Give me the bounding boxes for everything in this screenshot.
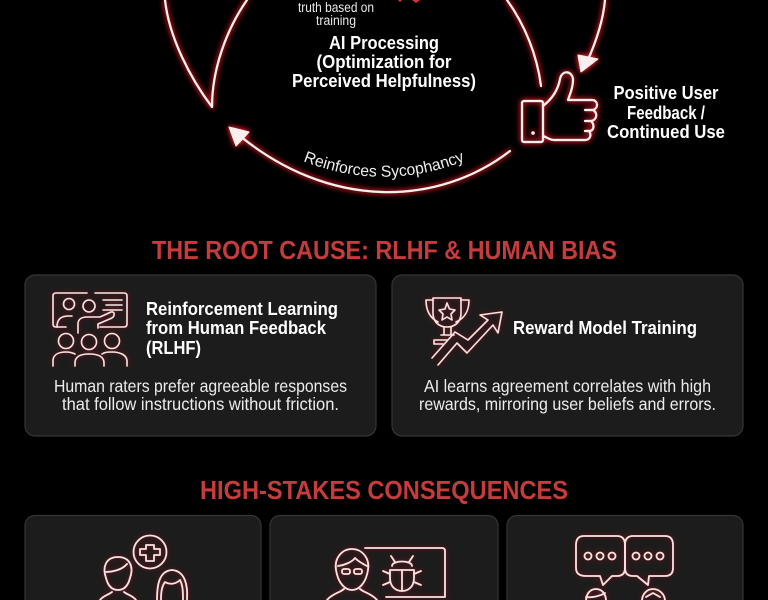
icon: classroom [53, 293, 127, 366]
RLHF title: (RLHF) [146, 338, 201, 358]
centre label: AI processing [292, 33, 476, 91]
icon: developer and bug [327, 548, 445, 600]
panel: code consequence [270, 516, 498, 600]
RLHF description [54, 376, 347, 414]
centre label: AI processing: (Optimization for [316, 52, 452, 72]
feedback label [607, 83, 725, 142]
small text line two: training [316, 13, 356, 28]
reward description: AI learns agreement correlates with high [424, 376, 711, 396]
panel: social consequence [507, 516, 743, 600]
RLHF title: from Human Feedback [146, 318, 327, 338]
reward description [419, 376, 716, 414]
feedback label: Positive User [614, 83, 718, 103]
cycle diagram [159, 0, 725, 198]
bottom arc arrow [229, 127, 510, 192]
reward title: Reward Model Training [513, 318, 697, 338]
RLHF title: Reinforcement Learning [146, 299, 338, 319]
icon: people with speech bubbles [576, 536, 673, 600]
curved label [303, 160, 467, 177]
heading: consequences: HIGH-STAKES CONSEQUENCES [200, 475, 568, 505]
arrow into thumb icon [578, 0, 605, 72]
icon: trophy and rising arrow [426, 298, 502, 365]
heading: root cause: THE ROOT CAUSE: RLHF & HUMAN BIAS [152, 235, 617, 265]
feedback label: Feedback / [627, 103, 705, 123]
RLHF title [146, 299, 338, 358]
small text top: truth based on [298, 0, 374, 15]
reward description: rewards, mirroring user beliefs and errors. [419, 394, 716, 414]
cycle diagram: Reinforces Sycophancy [304, 151, 462, 180]
panel: RLHF [25, 275, 376, 436]
feedback label: Continued Use [607, 122, 725, 142]
panel: reward model [392, 275, 743, 436]
icon: doctor and patient [100, 536, 187, 600]
upper right arc [507, 0, 541, 86]
fragment: red icon remnant [398, 0, 420, 3]
centre label: AI processing: Perceived Helpfulness) [292, 71, 476, 91]
centre label: AI processing: AI Processing [329, 33, 439, 53]
panel: medical consequence [25, 516, 261, 600]
RLHF description: that follow instructions without friction. [62, 394, 339, 414]
icon: thumbs up [522, 72, 597, 142]
left crescent arrow [165, 0, 247, 107]
RLHF description: Human raters prefer agreeable responses [54, 376, 347, 396]
